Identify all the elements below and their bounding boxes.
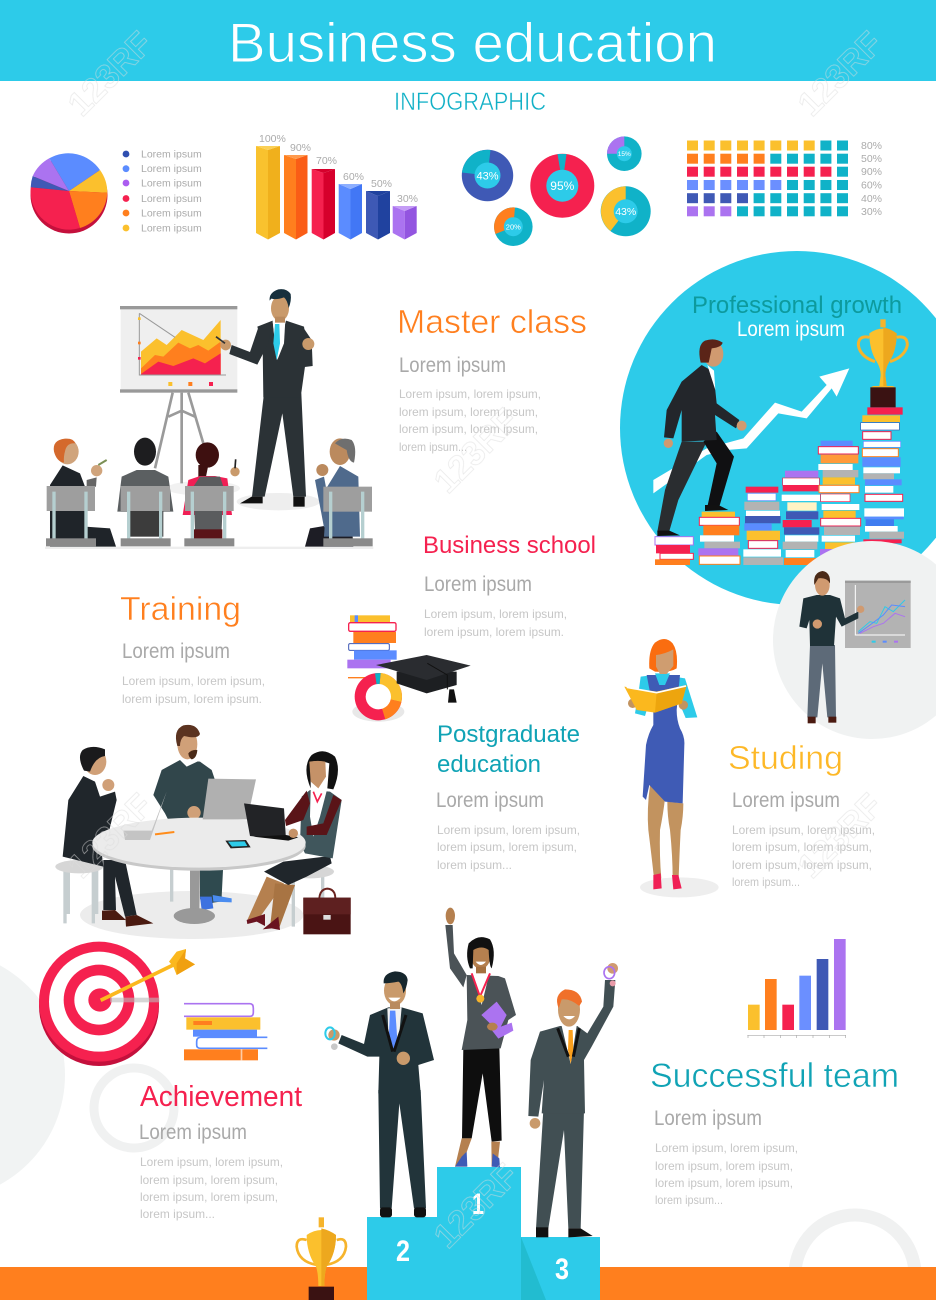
illustration: man on second place — [325, 971, 434, 1217]
text block: business school — [423, 532, 596, 639]
podium numbers: 1 — [472, 1188, 484, 1221]
illustration: book stairs — [655, 407, 904, 565]
bottom orange band — [0, 1267, 936, 1300]
text block: postgraduate education: education — [437, 751, 541, 778]
heading: training: Training — [120, 590, 241, 627]
pie legend: Lorem ipsum — [141, 163, 202, 175]
pie legend: Lorem ipsum — [141, 178, 202, 190]
heading: achievement: Achievement — [140, 1081, 302, 1113]
icon: trophy on books — [858, 319, 907, 407]
text block: achievement — [139, 1081, 302, 1221]
illustration: man with chart board — [799, 571, 911, 723]
text block: business school: Lorem ipsum, lorem ipsum, — [424, 607, 567, 621]
donut charts: 20% — [506, 222, 521, 232]
text block: studing: Lorem ipsum, lorem ipsum, — [732, 823, 875, 837]
square percentage grid: 40% — [861, 193, 882, 205]
pie legend — [123, 148, 202, 234]
bar chart 3D: 90% — [290, 142, 311, 154]
title: Business education — [228, 11, 717, 74]
icon: stacked books — [184, 1004, 267, 1060]
text block: training — [120, 590, 265, 706]
podium numbers: 3 — [555, 1253, 569, 1286]
square percentage grid: 30% — [861, 206, 882, 218]
text block: studing: lorem ipsum, lorem ipsum, — [732, 858, 872, 872]
illustration: team meeting at round table — [55, 725, 351, 939]
donut charts: 43% — [476, 170, 499, 182]
text block: training: Lorem ipsum, lorem ipsum, — [122, 674, 265, 688]
text block: training: Lorem ipsum — [122, 640, 230, 663]
text block: studing: lorem ipsum... — [732, 875, 800, 889]
subtitle: INFOGRAPHIC — [394, 88, 546, 116]
donut charts: 95% — [550, 179, 575, 193]
background grey circle bottom left — [0, 950, 65, 1200]
text block: successful team: lorem ipsum, lorem ipsum, — [655, 1176, 793, 1190]
text block: training: lorem ipsum, lorem ipsum. — [122, 692, 262, 706]
text block: master class: lorem ipsum, lorem ipsum, — [399, 422, 538, 436]
text block: successful team — [650, 1057, 899, 1207]
bar chart 3D: 100% — [259, 133, 286, 145]
podium numbers: 2 — [396, 1235, 410, 1268]
sub-heading: lorem ipsum: Lorem ipsum — [737, 318, 845, 341]
illustration: woman reading book — [624, 639, 719, 897]
text block: studing — [728, 739, 875, 889]
podium — [367, 1167, 600, 1300]
pie legend: Lorem ipsum — [141, 148, 202, 160]
heading: business school: Business school — [423, 532, 596, 559]
text block: studing: Lorem ipsum — [732, 789, 840, 812]
bar chart 3D: 70% — [316, 155, 337, 167]
heading: postgraduate education: Postgraduate — [437, 721, 580, 748]
bar chart 3D: 60% — [343, 171, 364, 183]
bar chart 3D: 50% — [371, 178, 392, 190]
watermark marks: 123RF — [427, 402, 526, 501]
text block: successful team: Lorem ipsum — [654, 1107, 762, 1130]
pie chart — [30, 153, 108, 234]
bar chart 3D: 30% — [397, 193, 418, 205]
watermark marks: 123RF — [791, 787, 890, 886]
text block: postgraduate education: Lorem ipsum, lorem ipsum, — [437, 823, 580, 837]
square percentage grid: 80% — [861, 140, 882, 152]
illustration: climbing businessman — [657, 339, 747, 536]
watermark marks: 123RF — [61, 787, 160, 886]
text block: business school: lorem ipsum, lorem ipsum. — [424, 625, 564, 639]
header band — [0, 0, 936, 81]
square percentage grid: 60% — [861, 180, 882, 192]
text block: postgraduate education — [436, 721, 580, 872]
podium numbers — [396, 1188, 569, 1286]
illustration: man on third place — [528, 963, 618, 1237]
heading: successful team: Successful team — [650, 1057, 899, 1095]
square percentage grid: 90% — [861, 166, 882, 178]
text block: achievement: lorem ipsum, lorem ipsum, — [140, 1173, 278, 1187]
illustration: master class presenter and audience — [45, 289, 373, 549]
text block: postgraduate education: lorem ipsum... — [437, 858, 512, 872]
text block: master class: Lorem ipsum — [399, 354, 506, 377]
text block: master class: Lorem ipsum, lorem ipsum, — [399, 387, 541, 401]
panel: professional growth circle — [620, 251, 936, 605]
text block: postgraduate education: Lorem ipsum — [436, 789, 544, 812]
donut charts — [462, 136, 651, 246]
text block: successful team: lorem ipsum, lorem ipsum, — [655, 1159, 793, 1173]
icon: books, graduation cap and donut — [347, 615, 471, 722]
heading: studing: Studing — [728, 739, 843, 776]
watermark marks: 123RF — [791, 25, 890, 124]
pie legend: Lorem ipsum — [141, 208, 202, 220]
text block: studing: lorem ipsum, lorem ipsum, — [732, 840, 872, 854]
square percentage grid — [687, 140, 882, 218]
watermark marks: 123RF — [427, 1157, 526, 1256]
text block: master class: lorem ipsum... — [399, 440, 467, 454]
text block: achievement: Lorem ipsum, lorem ipsum, — [140, 1155, 283, 1169]
text block: successful team: Lorem ipsum, lorem ipsum, — [655, 1141, 798, 1155]
icon: target with arrow — [39, 942, 195, 1066]
illustration: woman on first place — [445, 908, 516, 1167]
heading: professional growth: Professional growth — [692, 292, 902, 319]
chart: small column chart — [747, 939, 846, 1038]
square percentage grid: 50% — [861, 153, 882, 165]
pie legend: Lorem ipsum — [141, 222, 202, 234]
text block: postgraduate education: lorem ipsum, lorem ipsum, — [437, 840, 577, 854]
text block: master class — [397, 303, 587, 454]
text block: achievement: lorem ipsum... — [140, 1207, 215, 1221]
heading: master class: Master class — [397, 303, 587, 340]
text block: master class: lorem ipsum, lorem ipsum, — [399, 405, 538, 419]
icon: bottom trophy — [297, 1217, 346, 1300]
text block: successful team: lorem ipsum... — [655, 1193, 723, 1207]
panel: grey circle with presenter — [773, 541, 936, 739]
pie legend: Lorem ipsum — [141, 193, 202, 205]
icon: growth arrow — [653, 368, 849, 493]
donut charts: 43% — [615, 206, 636, 218]
text block: achievement: Lorem ipsum — [139, 1121, 247, 1144]
donut charts: 15% — [618, 151, 631, 158]
text block: business school: Lorem ipsum — [424, 573, 532, 596]
watermark marks: 123RF — [61, 25, 160, 124]
text block: achievement: lorem ipsum, lorem ipsum, — [140, 1190, 278, 1204]
bar chart 3D — [256, 133, 418, 240]
